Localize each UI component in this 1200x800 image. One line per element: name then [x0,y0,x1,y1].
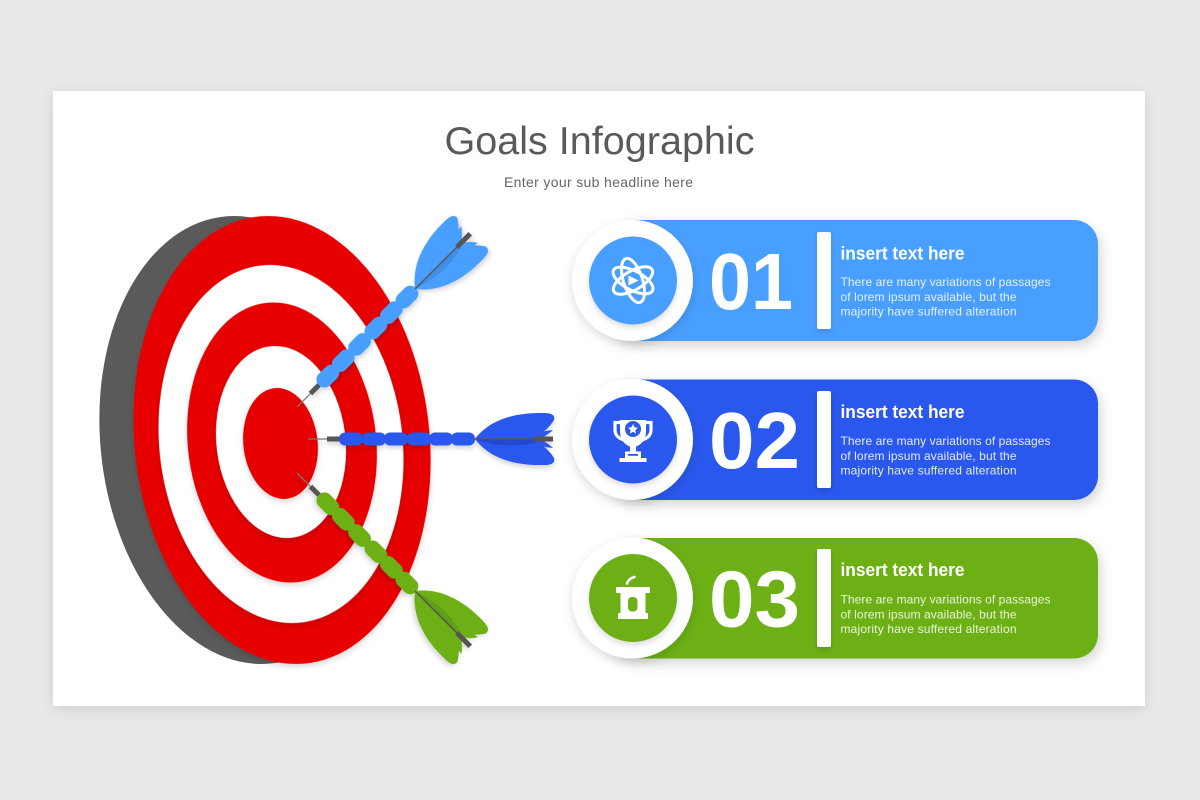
divider bar [817,391,831,488]
dart: green [278,454,491,667]
badge ring [572,379,693,500]
target side: grey depth [86,216,410,664]
divider bar [817,549,831,647]
card body text: of lorem ipsum available, but the [840,290,1017,304]
icon: atom [609,256,657,305]
target bullseye [240,388,321,499]
card body text: There are many variations of passages [840,592,1050,606]
badge disc [589,396,677,484]
target ring: inner red [179,302,385,582]
card body text: of lorem ipsum available, but the [840,449,1017,463]
card body text: majority have suffered alteration [840,304,1016,318]
number: 01 [709,237,793,326]
subtitle: Enter your sub headline here [504,174,693,190]
card 03 [572,538,1098,658]
card body text: There are many variations of passages [840,434,1050,448]
card body text: There are many variations of passages [840,275,1050,289]
card heading: insert text here [840,560,964,580]
card body text: majority have suffered alteration [840,464,1016,478]
card heading: insert text here [840,402,964,422]
target ring: inner white [210,346,352,538]
icon: podium [616,577,650,619]
dart: light blue [278,213,491,426]
card background [610,380,1098,500]
badge disc [589,554,677,642]
target ring: outer white [148,265,414,623]
title: Goals Infographic [444,120,754,163]
target ring: outer red [120,216,444,664]
card body text [840,275,1050,318]
card body text: majority have suffered alteration [840,622,1016,636]
card background [610,220,1098,341]
background panel [53,91,1145,706]
number: 02 [709,396,800,485]
card heading: insert text here [840,244,964,264]
card 02 [572,379,1098,500]
card body text [840,592,1050,636]
dart: dark blue [308,413,554,465]
card background [610,538,1098,658]
badge ring [572,220,693,341]
card body text [840,434,1050,478]
card 01 [572,220,1098,341]
badge disc [589,236,677,324]
card body text: of lorem ipsum available, but the [840,608,1017,622]
icon: trophy [615,420,651,462]
divider bar [817,232,831,329]
target board [86,216,444,664]
badge ring [572,538,693,658]
number: 03 [709,554,800,644]
